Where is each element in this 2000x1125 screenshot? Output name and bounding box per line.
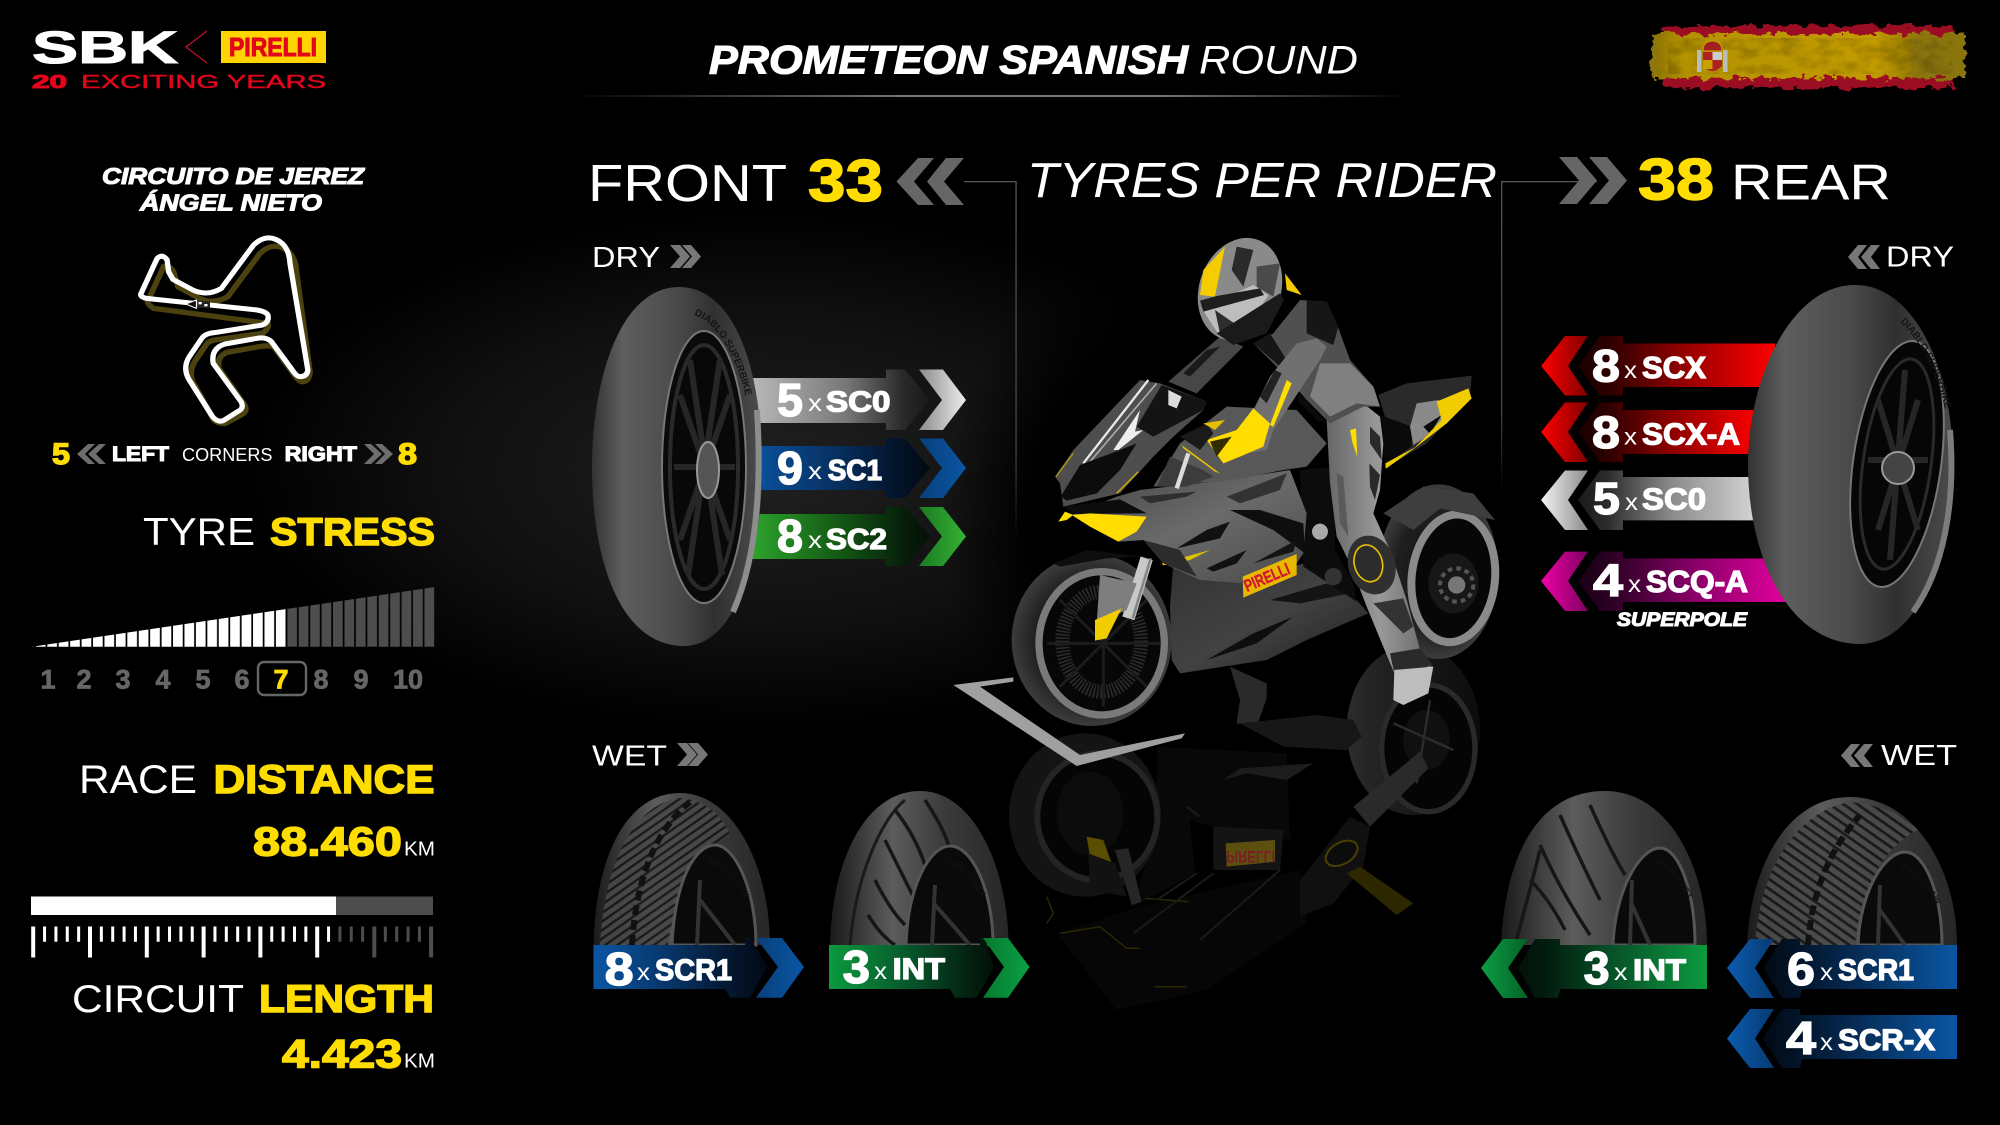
Pirelli badge: PIRELLI — [229, 32, 317, 62]
label: 4 x SCR-X rear: SCR-X — [1838, 1024, 1935, 1057]
rear intermediate tyre — [1501, 791, 1707, 945]
anniversary tagline: 20 — [32, 72, 67, 92]
circuit map — [141, 238, 310, 423]
stress scale numbers: 3 — [115, 665, 131, 695]
corners count — [52, 438, 417, 471]
label: 8 x SCR1 front: 8 — [605, 943, 634, 995]
label: 4 x SCQ-A rear: SCQ-A — [1646, 564, 1748, 599]
label: 8 x SCX rear — [1541, 336, 1775, 396]
chevrons pointing right — [1559, 157, 1627, 204]
label: 4 x SCR-X rear: x — [1820, 1029, 1834, 1055]
anniversary tagline — [32, 72, 326, 92]
front intermediate tyre: DIABLO WET — [984, 891, 986, 894]
yellow air intake — [1058, 499, 1147, 542]
circuit length: KM — [404, 1051, 435, 1073]
corners count: 5 — [52, 438, 70, 471]
label: 9 x SC1 front: x — [808, 458, 823, 484]
label: 5 x SC0 rear: SC0 — [1642, 482, 1706, 516]
label: 5 x SC0 rear: x — [1625, 489, 1639, 515]
race distance — [79, 758, 435, 864]
yellow glove and controls — [1180, 408, 1270, 473]
main side fairing — [1072, 470, 1307, 583]
label: 5 x SC0 rear — [1541, 470, 1760, 530]
SBK Pirelli logo — [32, 22, 326, 92]
label: 5 x SC0 front: SC0 — [826, 387, 890, 419]
tyre stress gauge — [32, 587, 435, 647]
reflected leg — [1300, 752, 1428, 917]
chevrons left — [77, 444, 106, 464]
sticker lettering: PIRELLI — [1241, 559, 1293, 596]
stress scale numbers: 1 — [40, 665, 56, 695]
circuit name — [102, 163, 365, 216]
stress scale numbers: 9 — [353, 665, 369, 695]
stress scale numbers: 8 — [313, 665, 329, 695]
label: 9 x SC1 front — [745, 438, 966, 498]
red logo chevron — [186, 31, 207, 63]
rear header: REAR — [1731, 154, 1891, 210]
front wheel — [1012, 550, 1172, 726]
Spanish flag — [1652, 26, 1965, 88]
rear header — [1559, 148, 1891, 212]
engine — [1300, 467, 1357, 602]
reflected foot — [1230, 667, 1267, 727]
front fork — [1095, 558, 1151, 641]
rear wet heading — [1841, 740, 1957, 772]
race distance: KM — [404, 838, 435, 860]
label: 6 x SCR1 rear: 6 — [1787, 943, 1815, 995]
label: 4 x SCR-X rear: 4 — [1786, 1012, 1816, 1064]
reflected rear wheel — [1347, 645, 1480, 815]
race distance: DISTANCE — [214, 758, 434, 802]
label: 4 x SCR-X rear — [1727, 1009, 1957, 1068]
rider far arm — [1168, 337, 1243, 393]
corners count: CORNERS — [182, 444, 272, 465]
front header: FRONT — [588, 155, 787, 213]
circuit length — [72, 978, 435, 1077]
label: 5 x SC0 front: x — [808, 390, 823, 416]
front dry tyre: DIABLO SUPERBIKE — [694, 309, 752, 396]
label: 3 x INT front: INT — [893, 953, 945, 986]
label: 8 x SCX rear: SCX — [1642, 350, 1706, 385]
chevrons pointing left — [896, 158, 964, 205]
stress scale numbers: 6 — [234, 665, 250, 695]
fairing graphics — [1056, 380, 1305, 577]
label: 8 x SCX-A rear — [1541, 402, 1760, 462]
rear dry tyre — [1748, 285, 1954, 644]
stress scale numbers — [40, 662, 423, 695]
round title: ROUND — [1199, 39, 1358, 83]
rear wet heading: WET — [1881, 740, 1957, 772]
corners count: RIGHT — [285, 443, 357, 466]
coat of arms — [1697, 41, 1728, 72]
label: 4 x SCQ-A rear: x — [1628, 571, 1642, 597]
stress value 7 highlighted — [258, 662, 306, 695]
label: 6 x SCR1 rear: x — [1820, 959, 1834, 985]
label: 5 x SC0 front — [745, 370, 966, 430]
front wet heading: WET — [592, 741, 667, 773]
reflected sticker lettering: PIRELLI — [1226, 847, 1275, 866]
label: 8 x SC2 front: SC2 — [826, 524, 887, 556]
track shadow — [148, 246, 310, 423]
superpole note: SUPERPOLE — [1617, 610, 1748, 631]
label: 9 x SC1 front: 9 — [777, 442, 803, 494]
label: 3 x INT rear: x — [1614, 959, 1628, 985]
parking bracket — [953, 677, 1185, 766]
front dry heading: DRY — [592, 242, 660, 274]
label: 5 x SC0 front: 5 — [777, 374, 803, 426]
circuit length: LENGTH — [259, 978, 434, 1021]
track outline — [141, 238, 308, 421]
SBK wordmark: SBK — [32, 22, 179, 73]
motorcycle and rider — [1012, 226, 1501, 726]
rear rain tyre: DIABLO RAIN — [1932, 888, 1940, 904]
label: 4 x SCQ-A rear — [1541, 552, 1790, 611]
rider torso — [1253, 300, 1380, 423]
circuit length: 4.423 — [282, 1033, 402, 1077]
front dry heading — [592, 242, 701, 274]
label: 8 x SCR1 front: x — [637, 959, 651, 985]
rear intermediate tyre: DIABLO WET — [1686, 884, 1693, 897]
label: 8 x SCX rear: 8 — [1592, 341, 1620, 392]
label: 8 x SC2 front — [745, 507, 966, 566]
front header — [588, 148, 964, 214]
bike reflection — [1009, 645, 1480, 1010]
upper fairing — [1055, 380, 1207, 507]
connector rear — [1501, 181, 1597, 491]
front header: 33 — [808, 148, 883, 214]
tyres per rider title: TYRES PER RIDER — [1027, 154, 1497, 208]
circuit length: CIRCUIT — [72, 978, 244, 1021]
label: 8 x SC2 front: 8 — [777, 510, 803, 562]
front dry tyre — [592, 287, 762, 646]
rear dry tyre: DIABLO SUPERBIKE — [1900, 318, 1952, 409]
front rain tyre: DIABLO RAIN — [747, 890, 750, 896]
label: 6 x SCR1 rear — [1727, 939, 1957, 998]
label: 3 x INT front: x — [874, 958, 888, 984]
label: 3 x INT front — [829, 938, 1030, 998]
tyre stress heading — [143, 511, 435, 554]
chevrons right — [364, 444, 393, 464]
circuit name: CIRCUITO DE JEREZ — [102, 163, 365, 189]
stress scale numbers: 4 — [155, 665, 171, 695]
label: 9 x SC1 front: SC1 — [828, 455, 882, 487]
round title — [709, 39, 1358, 83]
circuit name: ÁNGEL NIETO — [139, 189, 322, 216]
tyre stress heading: STRESS — [270, 511, 435, 554]
connector front — [964, 181, 1017, 541]
rear wheel — [1378, 484, 1501, 659]
start finish marker — [186, 300, 210, 308]
label: 8 x SC2 front: x — [808, 527, 823, 553]
corners count: 8 — [398, 438, 417, 471]
reflected front wheel — [1009, 733, 1161, 905]
front rain tyre — [594, 793, 770, 946]
reflected sticker — [1226, 840, 1275, 867]
label: 4 x SCQ-A rear: 4 — [1593, 555, 1623, 606]
stress value 7 highlighted: 7 — [273, 665, 289, 695]
label: 8 x SCR1 front: SCR1 — [655, 954, 732, 987]
race distance: 88.460 — [253, 818, 402, 864]
label: 8 x SCX-A rear: x — [1624, 424, 1638, 450]
tyre stress heading: TYRE — [143, 511, 255, 554]
rider leg — [1327, 403, 1433, 705]
rear rain tyre — [1747, 797, 1957, 945]
helmet — [1184, 226, 1302, 353]
reflected fairing panel — [1213, 827, 1283, 870]
front wet heading — [592, 741, 708, 773]
label: 5 x SC0 rear: 5 — [1593, 473, 1620, 524]
label: 3 x INT front: 3 — [843, 941, 870, 993]
reflected exhaust — [1240, 715, 1362, 750]
rear header: 38 — [1638, 148, 1714, 212]
ruler — [31, 934, 434, 942]
lower fairing — [1170, 563, 1368, 673]
rear dry heading — [1848, 242, 1954, 274]
label: 8 x SCX-A rear: SCX-A — [1642, 416, 1740, 452]
label: 8 x SCX rear: x — [1624, 357, 1638, 383]
label: 3 x INT rear — [1481, 939, 1707, 998]
round title: PROMETEON SPANISH — [709, 39, 1190, 83]
label: 6 x SCR1 rear: SCR1 — [1838, 954, 1914, 987]
stress scale numbers: 5 — [195, 665, 211, 695]
rider near arm — [1240, 338, 1327, 453]
stress scale numbers: 10 — [393, 665, 423, 695]
front intermediate tyre — [830, 791, 1008, 946]
lap progress bar — [31, 896, 433, 915]
label: 8 x SCR1 front — [594, 938, 804, 998]
stress scale numbers: 2 — [76, 665, 92, 695]
anniversary tagline: EXCITING YEARS — [81, 72, 326, 92]
label: 3 x INT rear: 3 — [1584, 942, 1610, 994]
Pirelli sticker — [1243, 554, 1297, 598]
race distance: RACE — [79, 758, 197, 802]
corners count: LEFT — [112, 443, 169, 466]
label: 8 x SCX-A rear: 8 — [1592, 407, 1620, 458]
rear dry heading: DRY — [1886, 242, 1954, 274]
tail section — [1378, 376, 1472, 469]
tank — [1153, 407, 1327, 487]
label: 3 x INT rear: INT — [1633, 954, 1686, 987]
